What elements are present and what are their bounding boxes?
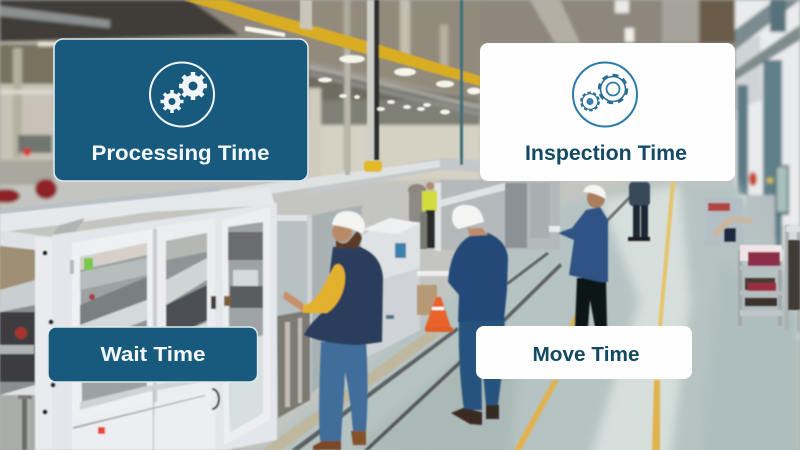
panel: Inspection Time bbox=[480, 43, 735, 181]
ceiling lights bbox=[339, 55, 365, 63]
white box unit bbox=[361, 218, 420, 360]
second glass machine bbox=[278, 205, 362, 420]
icon: outlined gears in a circle bbox=[573, 62, 637, 126]
worker in navy coat bbox=[549, 185, 608, 327]
panel: Move Time bbox=[476, 326, 692, 379]
heading: Inspection Time: Inspection Time bbox=[525, 142, 687, 165]
overhead white rail bbox=[0, 188, 275, 232]
dark floor tracks bbox=[364, 360, 462, 450]
left side panel bbox=[0, 230, 52, 450]
mid background racks bbox=[440, 180, 560, 250]
lower panels bbox=[80, 375, 207, 410]
panel: Processing Time bbox=[54, 39, 308, 181]
heading: Processing Time: Processing Time bbox=[92, 142, 270, 165]
icon: meshed gears in a circle bbox=[150, 62, 214, 126]
conveyor rail and cone bbox=[417, 271, 452, 276]
heading: Wait Time: Wait Time bbox=[100, 344, 206, 366]
heading: Move Time: Move Time bbox=[532, 344, 640, 366]
panel: Wait Time bbox=[48, 327, 258, 382]
yellow floor lines bbox=[658, 182, 675, 327]
main cabinet body bbox=[52, 203, 277, 450]
worker in yellow sleeves and vest bbox=[283, 211, 383, 450]
right carts bbox=[705, 198, 800, 332]
far workers bbox=[628, 182, 650, 241]
door glass panes bbox=[72, 229, 153, 450]
floor bbox=[240, 183, 800, 450]
yellow overhead beam bbox=[183, 0, 480, 86]
worker in blue jacket bbox=[448, 205, 508, 425]
